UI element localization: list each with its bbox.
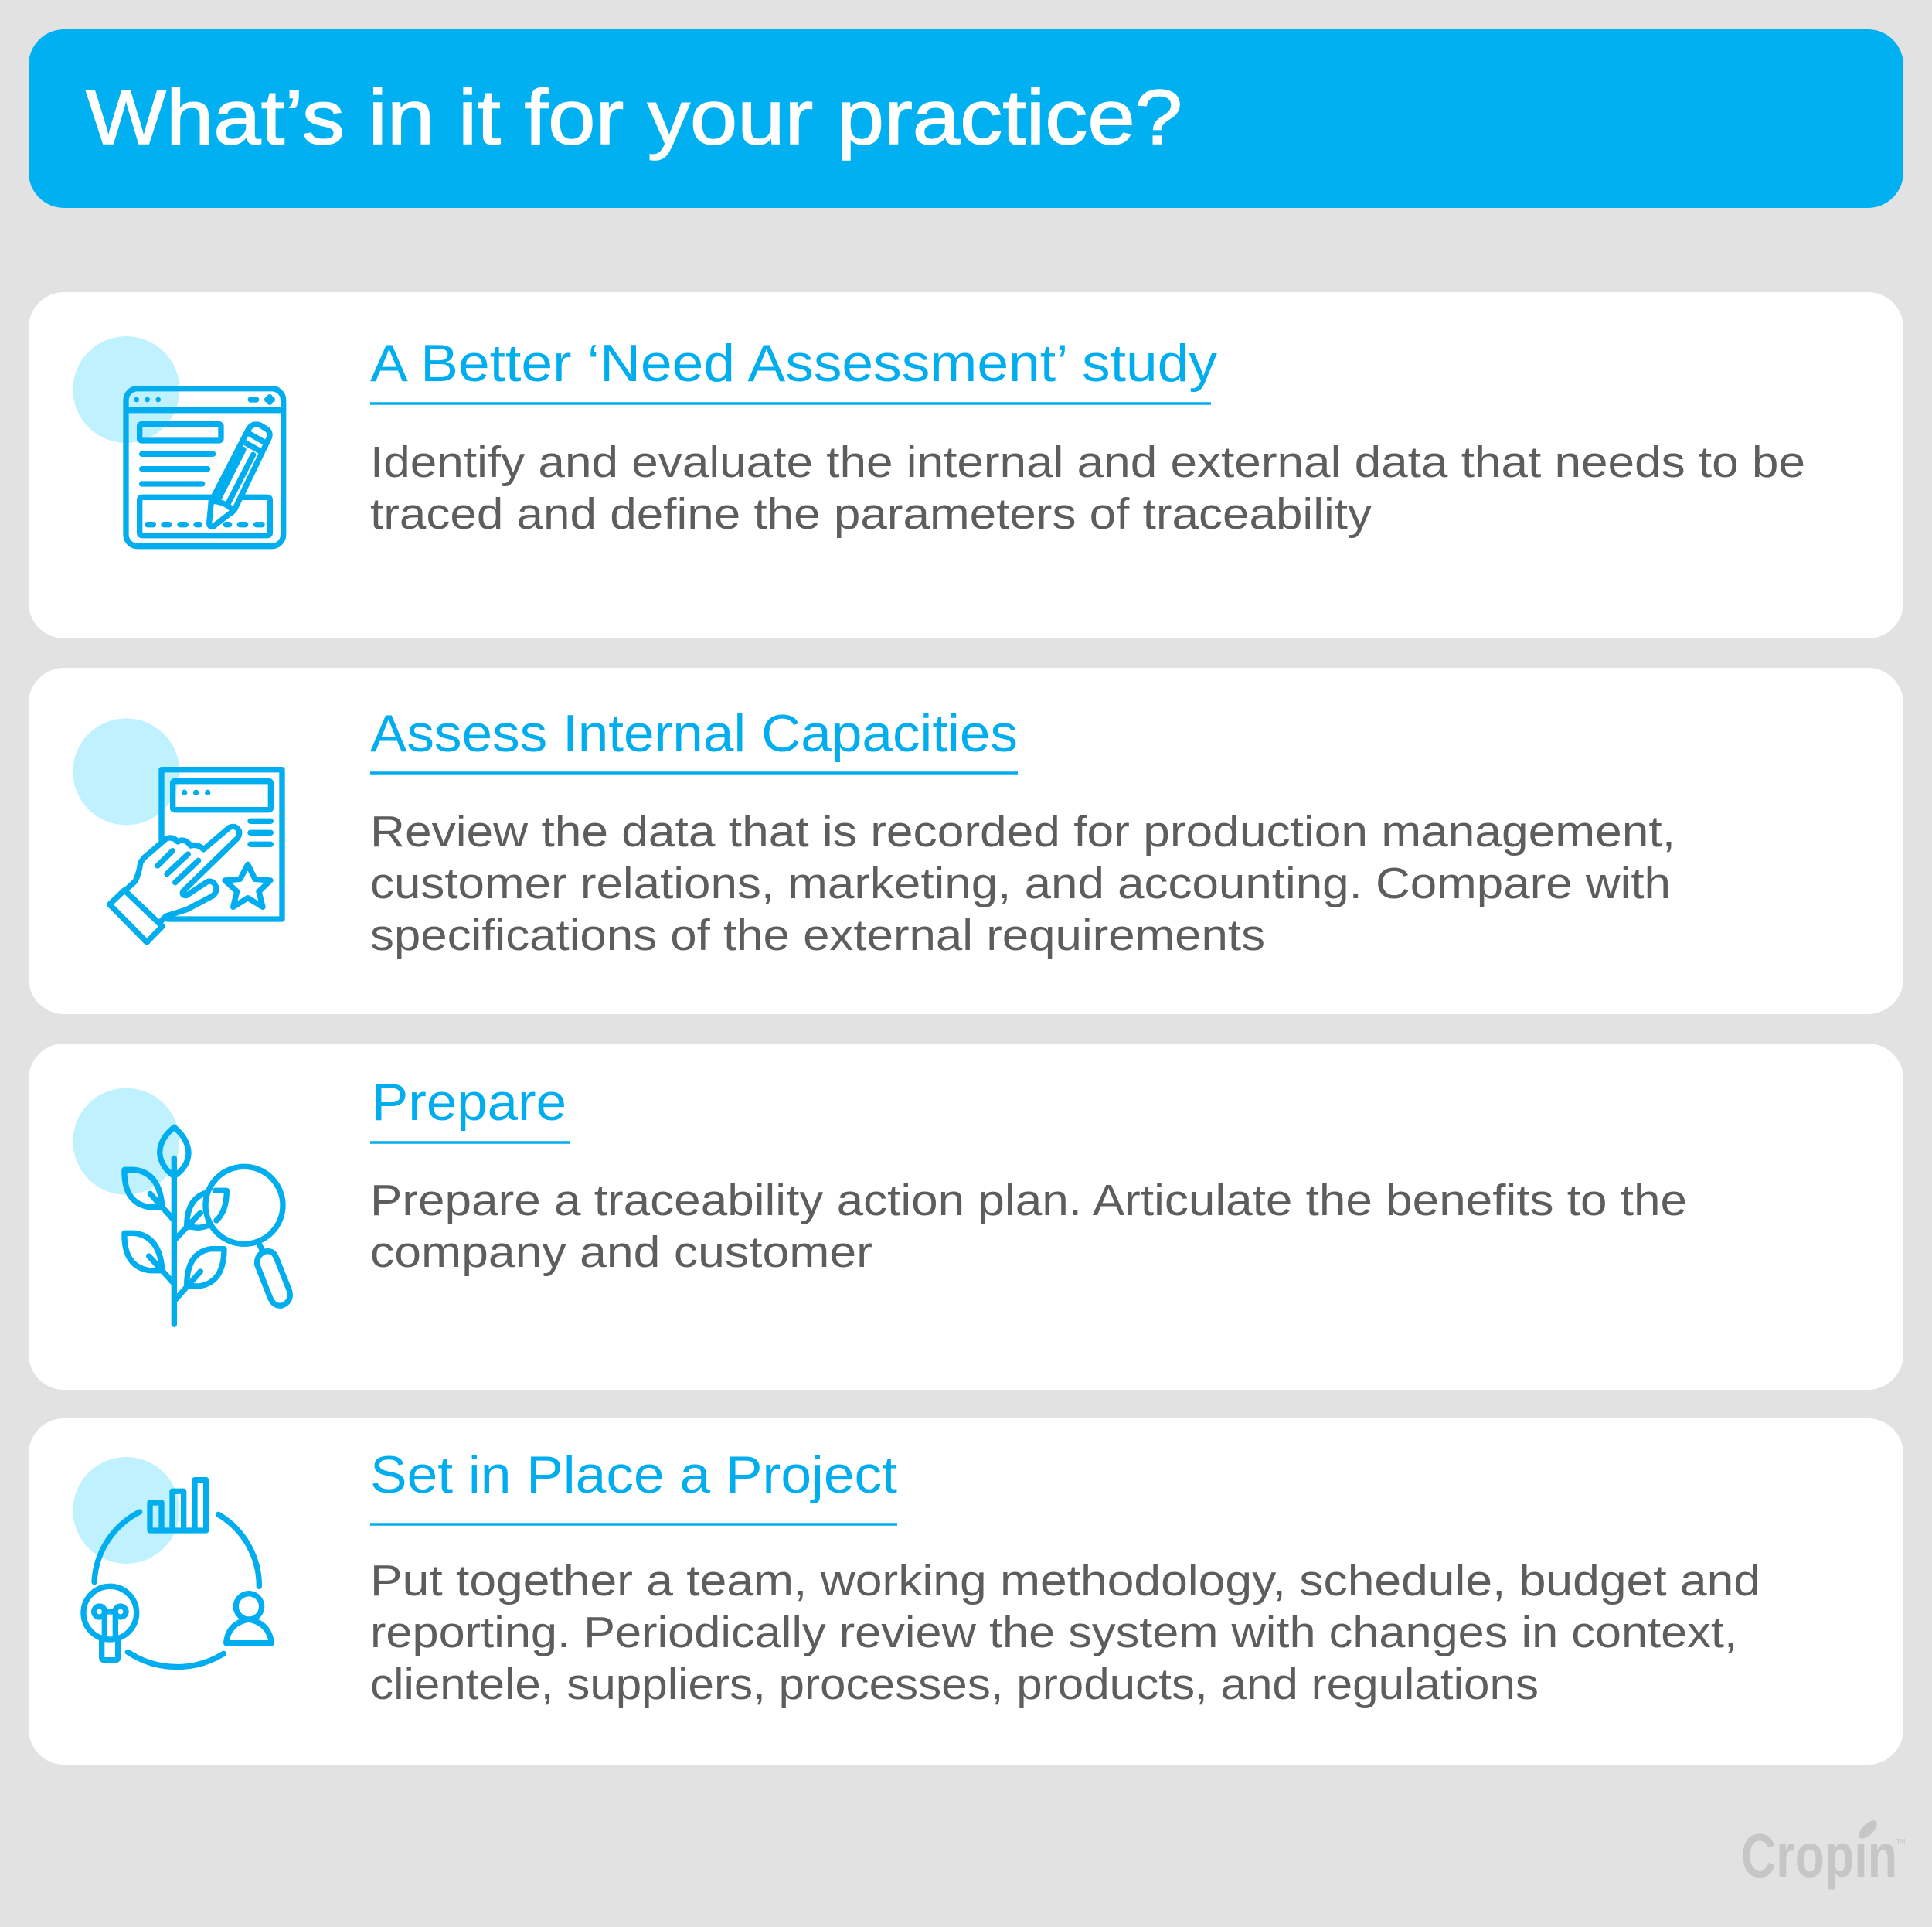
title: What’s in it for your practice? [86, 74, 1182, 161]
body text: company and customer [370, 1227, 872, 1277]
body text: Prepare a traceability action plan. Articulate the benefits to the [370, 1176, 1687, 1225]
body text [370, 807, 1675, 960]
heading: Assess Internal Capacities [370, 704, 1018, 763]
icon: cycle of chart, person and bulb [73, 1457, 271, 1667]
body text [370, 1556, 1760, 1709]
body text: clientele, suppliers, processes, products, and regulations [370, 1660, 1539, 1709]
body text: customer relations, marketing, and accounting. Compare with [370, 859, 1671, 908]
header banner [29, 29, 1903, 208]
panel: set in place a project [29, 1418, 1903, 1765]
panel: need assessment [29, 292, 1903, 638]
logo: Cropin: TM [1896, 1838, 1906, 1845]
body text: Put together a team, working methodology, schedule, budget and [370, 1556, 1760, 1605]
body text: specifications of the external requirements [370, 911, 1265, 960]
heading: A Better ‘Need Assessment’ study [370, 334, 1217, 393]
panel: internal capacities [29, 668, 1903, 1014]
heading: Set in Place a Project [370, 1445, 897, 1504]
body text: traced and define the parameters of traceability [370, 489, 1372, 539]
body text [370, 437, 1805, 539]
body text: Review the data that is recorded for production management, [370, 807, 1675, 856]
body text [370, 1176, 1687, 1277]
body text: reporting. Periodically review the system with changes in context, [370, 1608, 1737, 1657]
heading: Prepare [372, 1073, 566, 1132]
panel: prepare [29, 1044, 1903, 1390]
icon: plant with magnifier [73, 1088, 290, 1324]
icon: browser window with pencil [73, 336, 284, 546]
icon: hand pointing at document [73, 718, 282, 942]
icon: leaf [1855, 1817, 1880, 1842]
body text: Identify and evaluate the internal and external data that needs to be [370, 437, 1805, 487]
